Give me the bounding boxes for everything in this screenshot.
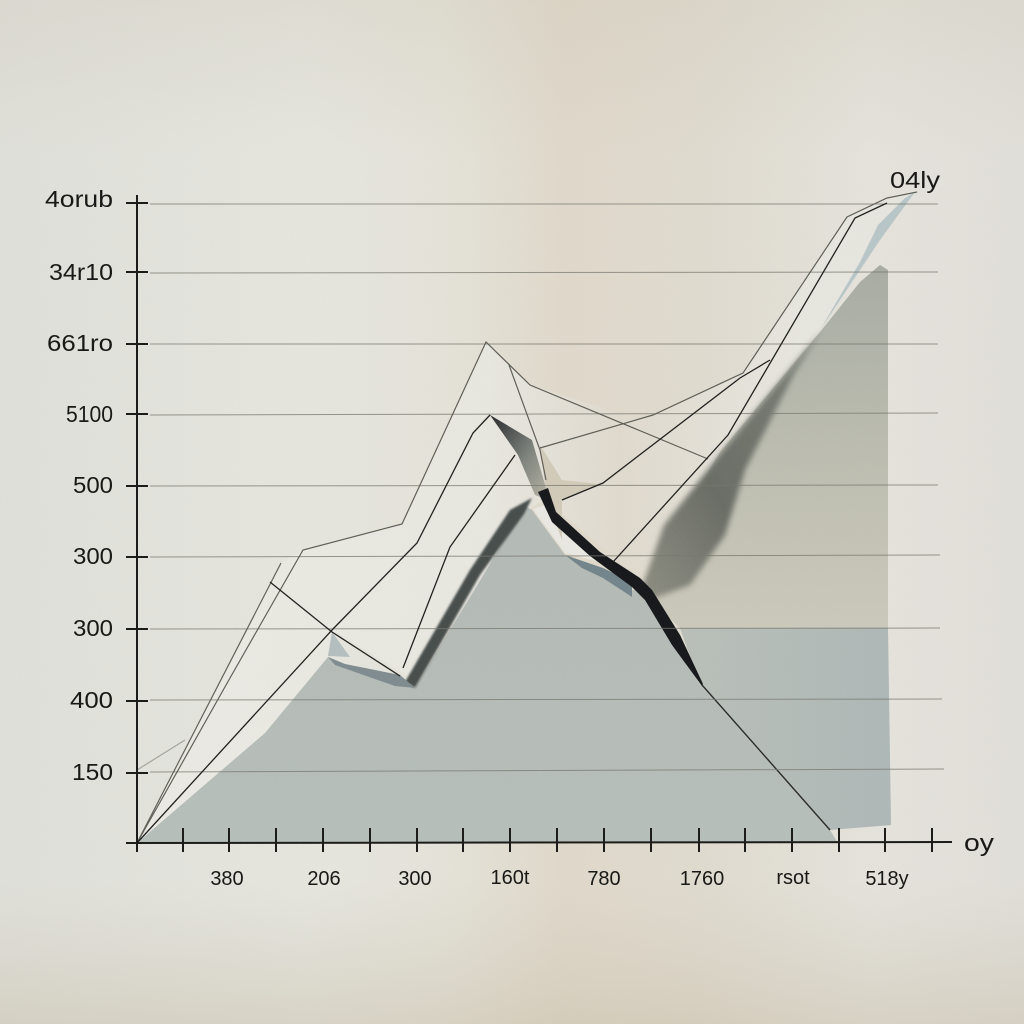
x axis labels: rsot <box>776 867 810 889</box>
cast shadow beside the right tear <box>640 330 822 600</box>
thin grey data lines <box>137 192 917 843</box>
x axis labels: 518y <box>865 868 909 890</box>
x axis labels <box>210 867 909 890</box>
y axis labels <box>45 186 113 785</box>
black data lines <box>137 203 887 843</box>
x axis labels: 206 <box>307 868 341 890</box>
pale blue torn edge at top right <box>820 192 915 330</box>
y axis <box>126 195 148 852</box>
lighter torn paper sheet <box>137 190 915 843</box>
thin crack tail down to the floor <box>702 685 830 830</box>
y axis labels: 5100 <box>66 401 113 427</box>
x axis <box>126 828 952 852</box>
y axis labels: 4orub <box>45 186 113 212</box>
white strip along the peak <box>533 505 600 562</box>
blue shadow patch below the crack <box>565 555 632 597</box>
beige fold behind the crack <box>540 445 600 540</box>
x axis labels: 300 <box>398 868 432 890</box>
y axis labels: 661ro <box>47 330 113 356</box>
y axis labels: 400 <box>70 687 113 713</box>
pale fold at the left notch <box>328 632 350 657</box>
dark shadow along left rising tear <box>405 498 532 688</box>
black crack <box>538 488 703 686</box>
x axis end label: oy <box>964 830 994 857</box>
x axis labels: 780 <box>587 868 621 890</box>
x axis labels: 1760 <box>680 868 724 890</box>
top right series label: 04ly <box>890 167 941 193</box>
shaded area: main grey mountain <box>137 506 838 843</box>
y axis labels: 150 <box>72 759 113 785</box>
dark paper fold at the peak <box>490 415 548 500</box>
shaded area: right upper panel <box>640 265 888 628</box>
x axis labels: 380 <box>210 868 244 890</box>
grid lines <box>150 204 944 772</box>
y axis labels: 300 <box>73 543 113 569</box>
y axis labels: 500 <box>73 472 113 498</box>
shaded area: right lower panel <box>680 628 891 830</box>
y axis labels: 34r10 <box>49 259 113 285</box>
y axis labels: 300 <box>73 615 113 641</box>
x axis labels: 160t <box>491 867 530 889</box>
shadow patch at the left notch <box>328 657 415 688</box>
